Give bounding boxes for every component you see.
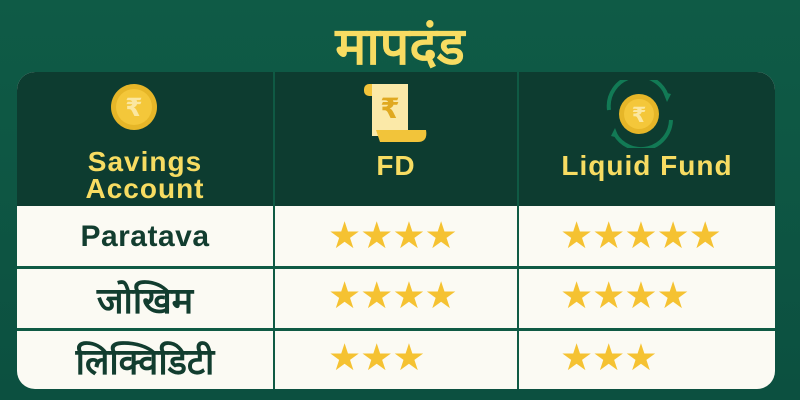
header: liquid fund: Liquid Fund bbox=[561, 150, 733, 181]
row: liquidity: लिक्विडिटी bbox=[76, 341, 214, 382]
icon: liquid fund coin with arrows: ₹ bbox=[632, 103, 646, 127]
row: paratava: Paratava bbox=[80, 220, 210, 253]
row: jokhim: ★★★★ bbox=[328, 274, 457, 317]
table panel bbox=[17, 72, 775, 389]
row: liquidity: ★★★ bbox=[560, 336, 657, 379]
row: liquidity: ★★★ bbox=[328, 336, 425, 379]
row: jokhim: ★★★★ bbox=[560, 274, 689, 317]
header: FD: FD bbox=[376, 150, 416, 181]
header: savings account bbox=[86, 146, 204, 204]
header: savings account: Savings bbox=[88, 146, 202, 177]
row: jokhim bbox=[96, 274, 689, 321]
icon: coin: ₹ bbox=[125, 93, 143, 122]
row: liquidity bbox=[75, 336, 657, 382]
row: paratava: ★★★★ bbox=[328, 214, 457, 257]
title: मापदंड bbox=[335, 18, 465, 76]
row: jokhim: जोखिम bbox=[97, 280, 193, 321]
header: savings account: Account bbox=[86, 173, 204, 204]
row: paratava bbox=[80, 214, 721, 257]
row: paratava: ★★★★★ bbox=[560, 214, 721, 257]
icon: coin bbox=[111, 84, 157, 130]
icon: liquid fund coin with arrows bbox=[606, 80, 673, 148]
icon: FD scroll bbox=[364, 84, 426, 142]
icon: FD scroll: ₹ bbox=[380, 92, 400, 125]
header row bbox=[17, 72, 775, 206]
